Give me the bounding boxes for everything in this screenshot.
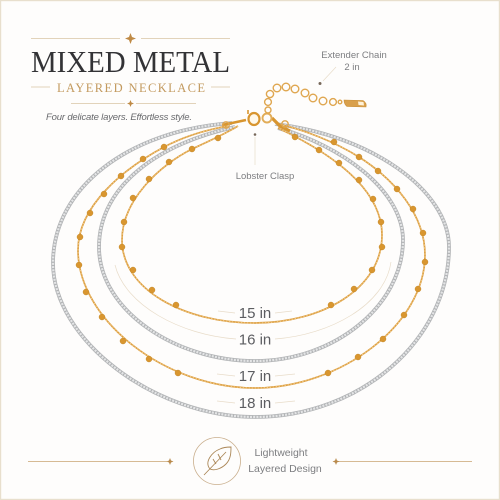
lobster clasp — [248, 113, 260, 125]
label: 18 in: 18 in — [239, 395, 271, 412]
badge text: Lightweight — [254, 447, 308, 459]
label: 17 in: 17 in — [239, 368, 271, 385]
callout: extender chain — [318, 50, 387, 85]
tagline: Four delicate layers. Effortless style. — [46, 112, 192, 123]
label: 15 in — [218, 305, 292, 322]
label: 15 in: 15 in — [239, 305, 271, 322]
necklace: 15 in gold — [119, 126, 385, 323]
title: MIXED METAL — [31, 44, 230, 79]
footer badge: Layered Design — [248, 463, 322, 475]
footer badge — [28, 438, 472, 484]
icon: top diamond star — [125, 33, 136, 44]
icon: feather in circle — [194, 438, 240, 484]
callout: lobster clasp — [236, 133, 294, 182]
label: 18 in — [217, 395, 295, 412]
icon: small diamond — [127, 100, 134, 107]
extender tag — [344, 100, 366, 107]
callout: extender chain: 2 in — [344, 62, 360, 73]
subtitle: LAYERED NECKLACE — [57, 81, 205, 95]
header block — [31, 33, 230, 123]
necklace: 16 in silver — [99, 127, 403, 361]
clasp and extender chain — [222, 83, 366, 131]
label: 17 in — [217, 368, 295, 385]
length guide arc: 16 in — [115, 262, 391, 339]
callout: lobster clasp: Lobster Clasp — [236, 171, 294, 182]
necklace: 17 in gold — [76, 124, 428, 388]
necklace: 18 in silver — [53, 123, 449, 417]
callout: extender chain: Extender Chain — [321, 50, 387, 61]
label: 16 in: 16 in — [239, 332, 271, 348]
